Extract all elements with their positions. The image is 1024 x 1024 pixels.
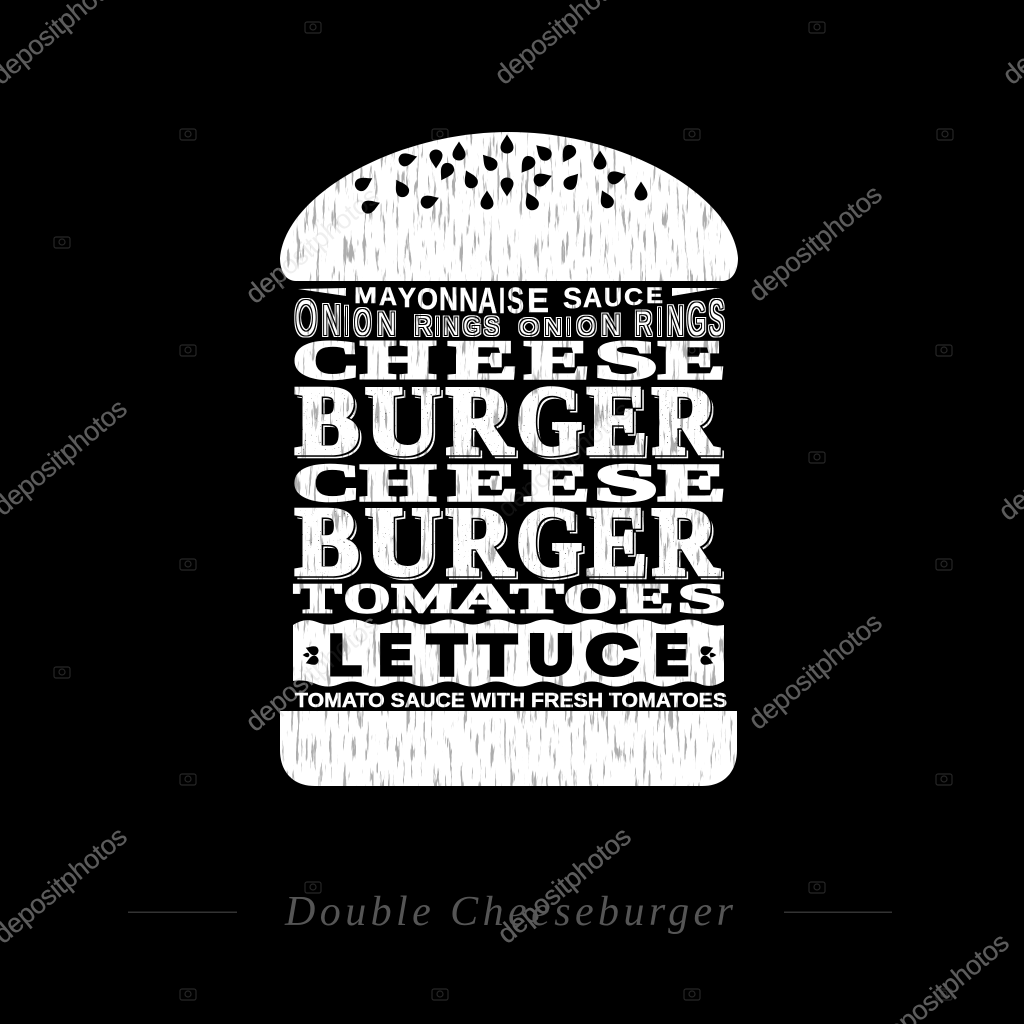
burger speckles one — [295, 388, 720, 456]
burger word one: R — [652, 367, 719, 475]
onion rings text: G — [687, 293, 706, 345]
burger word one: B — [295, 367, 359, 475]
tomatoes word: O — [564, 575, 617, 621]
burger word two: B — [295, 488, 359, 596]
watermarks behind burger: depositphotos — [240, 181, 385, 309]
watermarks behind burger: depositphotos — [240, 609, 385, 737]
burger word one — [295, 367, 719, 475]
tomatoes word: T — [511, 575, 563, 621]
faint watermarks over burger: depositphotos — [492, 395, 637, 523]
cheese word one — [293, 330, 725, 390]
mayonnaise sauce text: A — [583, 282, 602, 313]
burger word one: E — [587, 367, 647, 475]
onion rings text: O — [577, 311, 596, 341]
mayonnaise sauce text: E — [527, 282, 549, 320]
onion rings text: N — [322, 296, 341, 345]
onion rings text: I — [436, 313, 439, 341]
burger word two: R — [652, 488, 719, 596]
top bun — [280, 132, 738, 281]
burger word one: G — [516, 367, 582, 475]
tomatoes word: A — [455, 575, 514, 621]
lettuce ornament left — [303, 643, 320, 668]
lettuce word: L — [329, 623, 361, 686]
mayonnaise sauce text: N — [459, 281, 478, 318]
cheese word one: E — [449, 330, 517, 390]
lettuce word: E — [379, 623, 412, 686]
burger word two: G — [516, 488, 582, 596]
watermarks behind burger: depositphotos — [492, 821, 637, 949]
onion rings text: I — [567, 314, 570, 341]
lettuce word: U — [529, 623, 573, 686]
burger word one: U — [365, 367, 440, 475]
burger word one: R — [446, 367, 513, 475]
burger word two — [295, 488, 719, 596]
burger word two: E — [587, 488, 647, 596]
cheese word two: E — [659, 455, 725, 512]
mayonnaise sauce text: I — [499, 280, 505, 321]
cheese word one: E — [525, 330, 589, 390]
watermark over caption: depositphotos — [492, 821, 637, 949]
onion rings text: O — [519, 314, 539, 340]
cheese word one: C — [293, 330, 360, 390]
burger speckles two — [295, 509, 720, 577]
lettuce wavy panel — [293, 620, 724, 686]
cheese word two: C — [293, 455, 360, 512]
watermarks behind burger: depositphotos — [743, 607, 888, 735]
lettuce ornament right — [699, 643, 716, 668]
burger: S — [709, 290, 724, 346]
caption: Double Cheeseburger — [284, 889, 734, 935]
tomatoes word: E — [621, 575, 673, 621]
mayonnaise sauce text: E — [646, 283, 663, 308]
tomato sauce line: TOMATO SAUCE WITH FRESH TOMATOES — [295, 690, 727, 712]
sesame seeds — [353, 134, 648, 215]
onion rings text: N — [443, 313, 459, 341]
burger word two: R — [446, 488, 513, 596]
watermarks behind burger: depositphotos — [743, 179, 888, 307]
cheese word one: S — [595, 330, 657, 390]
faint watermarks over burger — [240, 181, 637, 737]
cheese word two — [293, 455, 725, 512]
onion rings text: N — [667, 297, 684, 344]
mayonnaise sauce text: C — [624, 284, 643, 311]
lettuce word — [329, 623, 688, 686]
mayonnaise sauce text: Y — [398, 282, 416, 313]
tomatoes word: O — [344, 575, 390, 621]
onion rings text: R — [635, 305, 652, 343]
mayonnaise sauce text: S — [507, 280, 524, 321]
burger word two: U — [365, 488, 440, 596]
faint watermarks over burger: depositphotos — [240, 181, 385, 309]
tomatoes word: M — [392, 575, 457, 621]
mayonnaise wedges — [298, 288, 720, 296]
bottom bun — [280, 711, 737, 786]
onion rings text: N — [601, 309, 621, 342]
tomatoes word: S — [678, 575, 725, 621]
mayonnaise sauce text: A — [478, 280, 497, 321]
onion rings text: S — [484, 313, 499, 341]
cheese word one: H — [361, 330, 435, 390]
onion rings text: O — [354, 302, 371, 343]
tomatoes word: T — [294, 575, 341, 621]
cheese word two: E — [525, 455, 589, 512]
mayonnaise sauce text: O — [417, 283, 438, 316]
tomatoes word — [294, 575, 725, 621]
grunge texture — [278, 130, 740, 788]
cheese word one: E — [659, 330, 725, 390]
onion rings text: N — [544, 314, 562, 340]
burger — [278, 130, 740, 788]
onion rings text: N — [377, 306, 396, 342]
lettuce word: C — [586, 623, 637, 686]
onion rings text — [295, 290, 724, 346]
mayonnaise sauce text — [354, 280, 663, 321]
onion rings text: I — [658, 301, 661, 344]
onion rings text: G — [463, 313, 481, 341]
mayonnaise sauce text: M — [354, 283, 377, 308]
cheese word two: H — [361, 455, 435, 512]
lettuce word: T — [478, 623, 516, 686]
mayonnaise sauce text: S — [563, 283, 582, 315]
onion rings text: R — [414, 310, 432, 341]
lettuce word: T — [428, 623, 466, 686]
onion rings text: O — [295, 290, 317, 346]
faint watermarks over burger: depositphotos — [240, 609, 385, 737]
cheese word two: S — [595, 455, 657, 512]
mayonnaise sauce text: U — [604, 282, 622, 312]
cheese word two: E — [449, 455, 517, 512]
onion rings text: I — [345, 298, 348, 344]
caption rule left — [128, 912, 237, 913]
mayonnaise sauce text: N — [439, 281, 458, 317]
mayonnaise sauce text: A — [379, 283, 397, 311]
lettuce word: E — [655, 623, 688, 686]
caption rule right — [784, 912, 892, 913]
